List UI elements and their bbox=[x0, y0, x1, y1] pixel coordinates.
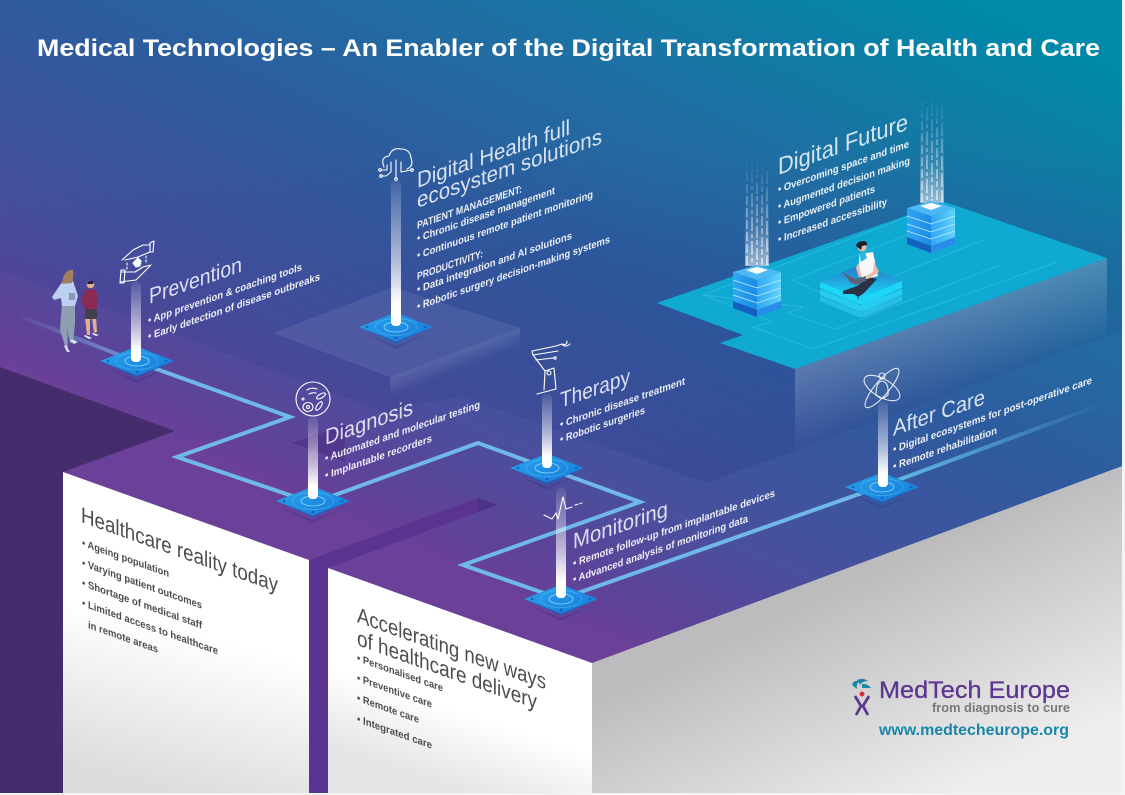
icon: caring hands bbox=[120, 241, 154, 283]
diagnosis floor notch bbox=[292, 425, 345, 462]
bullet list: new ways: • Personalised care bbox=[357, 652, 443, 695]
bullets: therapy: • Robotic surgeries bbox=[560, 405, 645, 446]
server: right bbox=[907, 201, 955, 253]
bullets: prevention: • Early detection of disease outbreaks bbox=[148, 271, 320, 343]
bullets: digital future: • Augmented decision making bbox=[778, 155, 910, 213]
icon: cells in petri dish bbox=[296, 382, 330, 416]
bullets: after care: • Remote rehabilitation bbox=[893, 425, 997, 473]
bullet list: healthcare reality: • Shortage of medical staff bbox=[82, 577, 202, 632]
bullets: therapy: • Chronic disease treatment bbox=[560, 375, 685, 431]
milestone: therapy bbox=[510, 341, 685, 490]
bullet list: new ways: • Remote care bbox=[357, 692, 419, 726]
bullets: diagnosis bbox=[325, 399, 480, 482]
grey cube face bbox=[592, 465, 1125, 795]
server: left bbox=[733, 265, 781, 317]
wordmark: MedTech Europe bbox=[879, 677, 1070, 704]
pillar bbox=[556, 488, 566, 598]
logo: medtech europe bbox=[852, 677, 1070, 739]
child bbox=[81, 281, 99, 339]
heading: digital health: ecosystem solutions bbox=[417, 123, 602, 213]
icon: cloud network bbox=[379, 149, 413, 180]
bullets: digital health: • Data integration and AI solutions bbox=[417, 230, 572, 296]
heading: accelerating new ways: of healthcare delivery bbox=[357, 625, 538, 714]
digital future text bbox=[778, 109, 910, 246]
icon: atom with person bbox=[860, 364, 904, 412]
pillar bbox=[308, 417, 318, 499]
milestone: monitoring bbox=[524, 488, 775, 621]
figures: woman and child bbox=[52, 270, 99, 352]
heading: digital health: Digital Health full bbox=[417, 114, 570, 193]
bullet list: healthcare reality: • Limited access to healthcare bbox=[82, 597, 218, 657]
pad bbox=[524, 584, 598, 621]
bullet list: healthcare reality bbox=[82, 537, 218, 657]
pad bbox=[100, 346, 174, 383]
pillar bbox=[878, 402, 888, 487]
bullet list: healthcare reality: in remote areas bbox=[88, 619, 158, 656]
patient journey path bbox=[20, 316, 1100, 599]
bullets: digital health: PRODUCTIVITY: bbox=[417, 248, 483, 283]
bullets: digital health: PATIENT MANAGEMENT: bbox=[417, 184, 522, 232]
bullets: digital future: • Increased accessibility bbox=[778, 196, 887, 246]
heading: digital future: Digital Future bbox=[778, 109, 908, 181]
person bbox=[842, 241, 879, 300]
bullets: after care: • Digital ecosystems for post-operative care bbox=[893, 375, 1092, 456]
milestone: prevention bbox=[100, 241, 320, 383]
heading: accelerating new ways: Accelerating new ways bbox=[357, 602, 546, 694]
heading: after care: After Care bbox=[893, 383, 985, 441]
heading: therapy: Therapy bbox=[560, 363, 631, 413]
bullets: digital health: • Continuous remote patient monitoring bbox=[417, 189, 593, 262]
bullet list: new ways bbox=[357, 652, 443, 752]
heading: monitoring: Monitoring bbox=[573, 495, 668, 554]
bullet list: healthcare reality: • Ageing population bbox=[82, 537, 169, 580]
bullets: digital future: • Overcoming space and time bbox=[778, 138, 909, 196]
milestone: digital health bbox=[359, 114, 610, 349]
bullets: digital health bbox=[417, 184, 610, 313]
pillar bbox=[542, 394, 552, 468]
bullets: digital health: • Chronic disease management bbox=[417, 185, 555, 245]
bullets: therapy bbox=[560, 375, 685, 446]
bullets: digital health: • Robotic surgery decision-making systems bbox=[417, 234, 610, 313]
raised platform: digital health bbox=[273, 287, 520, 398]
left dark pit bbox=[0, 367, 175, 795]
woman bbox=[52, 270, 78, 352]
bullets: monitoring: • Advanced analysis of monitoring data bbox=[573, 513, 749, 586]
bullet list: new ways: • Integrated care bbox=[357, 713, 432, 752]
heading: healthcare reality today: Healthcare reality today bbox=[81, 502, 279, 597]
panel: accelerating new ways bbox=[328, 568, 592, 795]
raised platform: digital future bbox=[657, 202, 1107, 454]
data stream: right server bbox=[920, 97, 944, 203]
stacked platform bbox=[820, 265, 902, 317]
bullet list: new ways: • Preventive care bbox=[357, 672, 432, 711]
title: Medical Technologies – An Enabler of the Digital Transformation of Health and Care bbox=[37, 35, 1100, 62]
bullets: diagnosis: • Implantable recorders bbox=[325, 433, 432, 482]
data stream: left server bbox=[745, 160, 769, 266]
tagline: from diagnosis to cure bbox=[932, 700, 1070, 715]
upper floor step shading bbox=[0, 0, 1125, 483]
bullet list: healthcare reality: • Varying patient outcomes bbox=[82, 557, 202, 612]
pad bbox=[845, 472, 919, 509]
bullets: monitoring: • Remote follow-up from implantable devices bbox=[573, 488, 775, 570]
milestone: after care bbox=[845, 364, 1092, 509]
heading: prevention: Prevention bbox=[149, 251, 242, 309]
person with laptop on stacked platform bbox=[820, 241, 902, 317]
bullets: digital future bbox=[778, 138, 910, 246]
website: www.medtecheurope.org bbox=[878, 722, 1069, 739]
pillar bbox=[391, 180, 401, 326]
heading: diagnosis: Diagnosis bbox=[325, 394, 413, 450]
pad bbox=[510, 454, 584, 490]
bullets: diagnosis: • Automated and molecular testing bbox=[325, 399, 480, 465]
pad bbox=[359, 312, 433, 349]
pillar bbox=[131, 282, 141, 362]
icon: robotic arm bbox=[532, 341, 570, 394]
pad bbox=[276, 486, 350, 523]
milestone: diagnosis bbox=[276, 382, 480, 523]
panel: healthcare reality today bbox=[63, 472, 309, 795]
logo mark bbox=[852, 679, 871, 715]
icon: heartbeat bbox=[544, 497, 582, 519]
bullets: digital future: • Empowered patients bbox=[778, 183, 875, 229]
purple column and band between panels bbox=[309, 498, 497, 795]
bullets: prevention: • App prevention & coaching tools bbox=[148, 261, 302, 327]
